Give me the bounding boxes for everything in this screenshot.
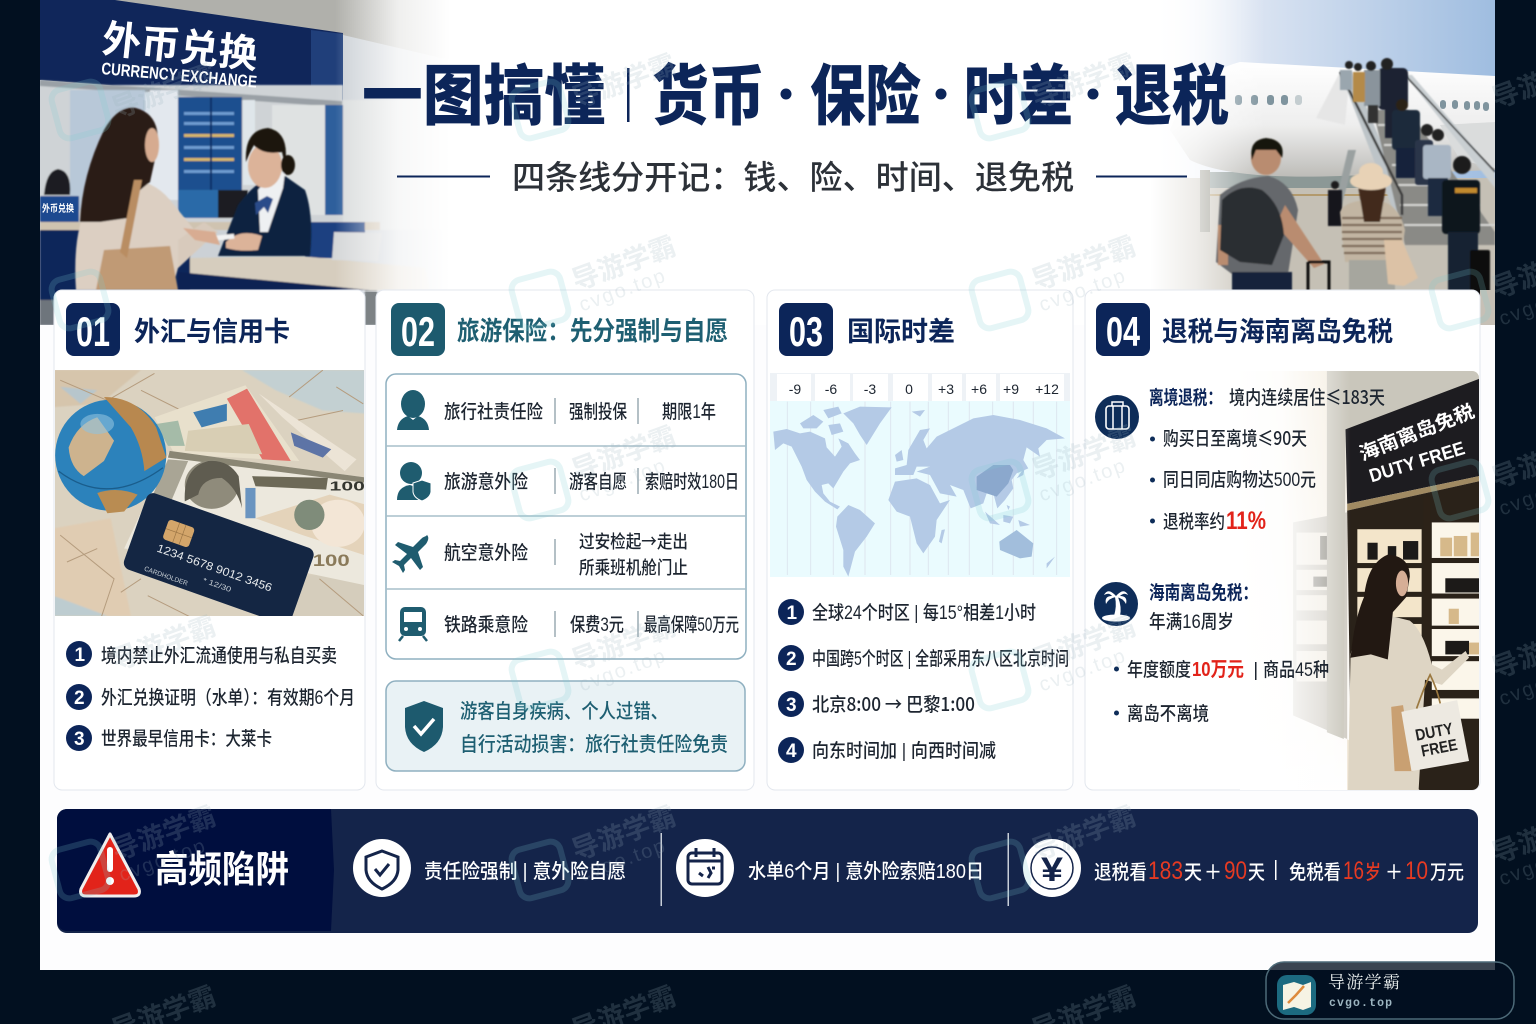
row: railway accident [444,614,739,636]
callout: liability exclusions [386,681,745,771]
icon: airplane [392,534,428,573]
shop sign: 海南离岛免税 [1356,399,1478,465]
icon: calendar [676,839,734,897]
photo: globe, banknotes and card: 100 [330,479,365,494]
badge 03 [779,303,833,356]
photo: globe, banknotes and card: CARDHOLDER [143,566,189,588]
subtitle: 四条线分开记：钱、险、时间、退免税 [512,159,1074,196]
icon: yen coin [1023,839,1081,897]
brand name: 导游学霸 [1328,973,1400,992]
trap text 2: 水单6个月 | 意外险索赔180日 [748,860,984,883]
brand url: cvgo.top [1329,997,1392,1010]
watermark pattern: 导游学霸 [1028,231,1140,296]
badge 04 [1096,303,1150,356]
text block: Hainan duty free [1114,581,1329,725]
shopper [1348,614,1469,797]
watermark pattern: cvgo.top [1036,264,1130,316]
watermark pattern: cvgo.top [576,454,670,506]
icon: train [399,607,427,641]
list: foreign exchange facts: 世界最早信用卡：大莱卡 [101,728,272,750]
trap text 3: 16 [1343,857,1364,885]
customer [75,108,220,290]
strip behind cards at right edge [1480,290,1495,325]
list: time zone facts: 1 [786,603,798,624]
icon: suitcase [1095,395,1139,439]
trap text 3: 免税看 [1289,861,1341,884]
row: travel accident: 游客自愿 [569,471,627,493]
badge 04: 04 [1106,308,1140,355]
text block: Hainan duty free: 年度额度 [1127,659,1191,681]
icon: palm island [1094,582,1138,626]
time zone header cells: -6 [825,381,837,397]
row: travel agency liability: 旅行社责任险 [444,401,543,423]
watermark pattern: cvgo.top [576,644,670,696]
icon: shield [353,839,411,897]
icon: map logo [1277,975,1316,1015]
row: travel agency liability: 强制投保 [569,401,627,423]
trap text 3: 天 [1184,862,1202,884]
logo badge [1266,962,1514,1019]
hero photo: currency exchange counter: 外币兑换 [42,202,74,215]
watermark pattern: 导游学霸 [1028,801,1140,866]
stairs [1316,72,1495,245]
title [362,59,1229,133]
row: aviation accident: 过安检起→走出 [579,528,688,554]
watermark pattern: 导游学霸 [568,421,680,486]
text block: departure tax refund: 11% [1226,507,1266,535]
title: 一图搞懂 [362,59,605,133]
badge 02 [391,303,445,356]
heading 03: 国际时差 [847,317,955,347]
list: time zone facts: 全球24个时区 | 每15°相差1小时 [812,602,1036,624]
text block: Hainan duty free: 10万元 [1192,659,1244,681]
trap text 3: 天 [1248,862,1265,884]
photo: globe, banknotes and card: 1234 5678 9012 3456 [155,543,273,595]
panel: 01 foreign exchange and credit cards [53,290,370,790]
table: insurance types [386,374,746,659]
list: foreign exchange facts: 1 [74,645,86,666]
woman in hat [1340,163,1418,292]
list: time zone facts: 3 [786,695,797,716]
watermark pattern: cvgo.top [576,264,670,316]
photo: duty free shop: FREE [1420,736,1459,761]
globe [55,400,166,511]
time zone header cells: +12 [1035,381,1059,397]
row: travel agency liability [444,401,716,423]
heading: traps: 高频陷阱 [155,849,289,890]
shopping bag [1391,705,1413,771]
trap text 3: ＋ [1204,862,1222,884]
row: aviation accident: 航空意外险 [444,542,528,564]
watermark pattern: cvgo.top [116,834,210,886]
trap text 3: 90 [1224,857,1247,885]
trap text 3: 岁 [1365,861,1381,884]
watermark pattern: 导游学霸 [108,801,220,866]
text block: Hainan duty free: 离岛不离境 [1127,703,1209,725]
row: travel accident: 旅游意外险 [444,471,528,493]
list: foreign exchange facts: 2 [74,688,85,709]
photo: duty free shop: DUTY FREE [1367,438,1468,487]
watermark pattern: 导游学霸 [108,611,220,676]
icon: shield check [405,701,443,752]
watermark pattern: 导游学霸 [1028,611,1140,676]
text block: departure tax refund: 购买日至离境≤90天 [1163,424,1307,451]
row: railway accident: 铁路乘意险 [444,614,528,636]
watermark pattern: 导游学霸 [1028,49,1140,114]
photo: globe, banknotes and card: * 12/30 [202,576,233,594]
trap text 3: 183 [1148,857,1183,885]
badge 01: 01 [76,308,110,355]
photo: duty free shop: DUTY [1414,720,1455,745]
title: 保险 [810,59,921,133]
text block: departure tax refund: 境内连续居住≤183天 [1229,383,1385,410]
watermark pattern: 导游学霸 [1028,421,1140,486]
watermark pattern: 导游学霸 [108,59,220,124]
row: travel accident [444,471,739,493]
row: aviation accident: 所乘班机舱门止 [579,558,688,578]
text block: departure tax refund: 离境退税： [1149,386,1222,409]
heading 01: 外汇与信用卡 [134,317,290,347]
list: time zone facts: 4 [786,741,797,762]
list: time zone facts: 中国跨5个时区 | 全部采用东八区北京时间 [812,648,1069,670]
badge 03: 03 [789,308,823,355]
list: time zone facts: 北京8:00 → 巴黎1:00 [812,690,975,717]
list: time zone facts [778,599,1069,763]
hero photo: boarding stairs [1167,0,1495,295]
badge 01 [66,303,120,356]
trap text 3 [1094,857,1464,885]
heading 04: 退税与海南离岛免税 [1162,317,1393,347]
trap text 3: 10 [1405,857,1428,885]
time zone header cells: 0 [905,381,913,397]
list: foreign exchange facts [66,641,355,751]
man with backpack [1216,138,1329,294]
icon: responsible person [397,390,429,430]
clerk [212,128,311,256]
chart: world time zone map [770,373,1070,577]
icon: person with shield [397,462,431,501]
hero photo: currency exchange counter: CURRENCY EXCHANGE [101,59,258,92]
photo: duty free shop [1236,370,1486,798]
banner: high-frequency traps [57,809,1478,933]
list: foreign exchange facts: 境内禁止外汇流通使用与私自买卖 [101,645,337,667]
icon: warning triangle [81,834,139,896]
callout text: 自行活动损害：旅行社责任险免责 [460,733,728,756]
watermark pattern: cvgo.top [1036,644,1130,696]
list: time zone facts: 向东时间加 | 向西时间减 [812,740,996,762]
time zone header cells: -9 [789,381,801,397]
row: travel accident: 索赔时效180日 [645,471,739,493]
currency sign text: 外币兑换 [100,18,260,77]
credit card [124,493,314,616]
photo: globe, banknotes and card [53,367,370,626]
watermark pattern: 导游学霸 [568,49,680,114]
boarding passengers [1328,58,1490,300]
title: 时差 [964,59,1073,133]
photo: globe, banknotes and card: 100 [313,551,350,570]
time zone header cells: -3 [864,381,876,397]
text block: departure tax refund [1149,383,1385,535]
panel: 04 tax refund and Hainan duty free [1085,290,1486,798]
callout text: 游客自身疾病、个人过错、 [460,700,668,723]
row: travel agency liability: 期限1年 [662,401,716,423]
row: aviation accident [444,528,688,578]
watermark pattern: 导游学霸 [568,231,680,296]
row: railway accident: 保费3元 [570,614,624,636]
watermark pattern: cvgo.top [1036,454,1130,506]
heading 02: 旅游保险：先分强制与自愿 [457,316,728,346]
title: 退税 [1115,59,1229,133]
text block: departure tax refund: 退税率约 [1163,511,1225,533]
time zone header cells: +6 [971,381,987,397]
row: railway accident: 最高保障50万元 [644,614,739,636]
text block: Hainan duty free: 商品45种 [1263,659,1329,681]
text block: departure tax refund: 同日同店购物达500元 [1163,469,1316,491]
watermark pattern: cvgo.top [576,834,670,886]
icon: yen coin: ¥ [1041,851,1063,889]
panel: 03 time zones [767,290,1073,790]
trap text 3: ＋ [1385,862,1403,884]
panel: 02 travel insurance [376,290,754,790]
hero photo: currency exchange counter [40,0,450,325]
callout text [460,700,728,756]
trap text 1: 责任险强制 | 意外险自愿 [424,860,626,883]
time zone header cells: +3 [938,381,954,397]
time zone header cells [770,373,1070,401]
trap text 3: 退税看 [1094,861,1147,884]
badge 02: 02 [401,308,435,355]
list: foreign exchange facts: 外汇兑换证明（水单）：有效期6个月 [101,687,355,709]
text block: Hainan duty free: 年满16周岁 [1149,611,1234,633]
trap text 3: 万元 [1430,862,1464,884]
text block: Hainan duty free: 海南离岛免税： [1149,581,1258,604]
list: foreign exchange facts: 3 [74,729,85,750]
list: time zone facts: 2 [786,649,797,670]
title: 货币 [652,59,765,133]
watermark pattern: 导游学霸 [568,801,680,866]
time zone header cells: +9 [1003,381,1019,397]
watermark pattern: 导游学霸 [568,611,680,676]
